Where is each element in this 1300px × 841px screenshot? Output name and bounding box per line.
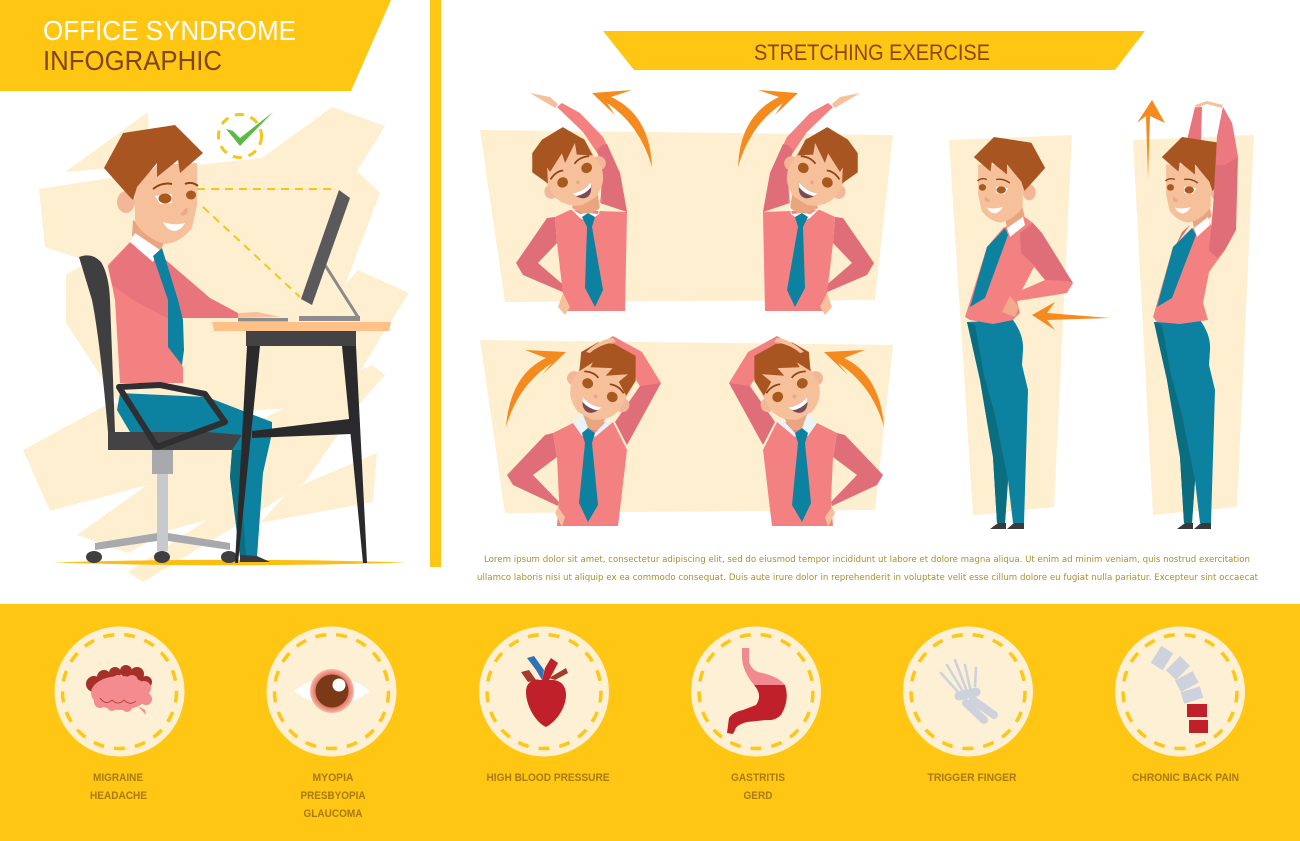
figure: side stretch left with arrow bbox=[516, 90, 652, 315]
label: gastritis gerd bbox=[731, 772, 785, 802]
figure: neck stretch right with arrow bbox=[729, 332, 884, 527]
figure: overhead stretch standing man bbox=[1137, 100, 1238, 529]
keyboard bbox=[238, 318, 288, 322]
label: migraine headache: MIGRAINE bbox=[93, 772, 143, 784]
symptom: gastritis gerd bbox=[691, 626, 821, 802]
floor shadow bbox=[53, 560, 406, 565]
heading: office syndrome: OFFICE SYNDROME bbox=[43, 15, 296, 46]
icon: brain bbox=[86, 665, 152, 715]
symptom: migraine headache bbox=[54, 626, 184, 802]
panel: symptoms band bbox=[0, 604, 1300, 841]
desk bbox=[212, 322, 391, 563]
label: trigger finger: TRIGGER FINGER bbox=[928, 772, 1017, 784]
label: high blood pressure: HIGH BLOOD PRESSURE bbox=[486, 772, 610, 784]
arrow: upward bbox=[1137, 100, 1165, 178]
figure: side stretch right with arrow bbox=[738, 90, 874, 315]
panel: overhead-stretch background bbox=[1133, 135, 1254, 515]
icon: stomach bbox=[727, 648, 787, 734]
label: gastritis gerd: GERD bbox=[744, 790, 773, 802]
label: migraine headache bbox=[90, 772, 147, 802]
heading: stretching exercise: STRETCHING EXERCISE bbox=[754, 40, 990, 65]
sight lines bbox=[197, 189, 337, 297]
icon: green check mark bbox=[218, 112, 273, 158]
symptom: high blood pressure bbox=[479, 626, 610, 784]
panel: back-press background bbox=[949, 135, 1072, 515]
figure: neck stretch left with arrow bbox=[506, 332, 661, 527]
label: myopia presbyopia glaucoma bbox=[300, 772, 366, 820]
divider bar bbox=[430, 0, 441, 567]
text block: lorem ipsum: ullamco laboris nisi ut aliquip ex ea commodo consequat. Duis aute irure dolor in reprehenderit in voluptate velit esse cillum dolore eu fugiat nulla pariatur. Excepteur sint occaecat bbox=[477, 573, 1258, 583]
seated man bbox=[104, 125, 280, 562]
symptom: myopia bbox=[266, 626, 396, 820]
heading: infographic: INFOGRAPHIC bbox=[43, 45, 222, 76]
panel: seated posture illustration bbox=[23, 107, 409, 582]
chair armrest bbox=[119, 385, 225, 447]
panel: title banner bbox=[0, 0, 391, 91]
cream background shapes bbox=[23, 107, 409, 582]
icon: heart bbox=[521, 656, 568, 727]
symptom: trigger finger bbox=[903, 626, 1033, 784]
icon: hand bones bbox=[941, 660, 994, 720]
panel: top side-stretch background bbox=[480, 130, 893, 302]
panel: bottom neck-stretch background bbox=[480, 340, 893, 513]
symptom: chronic back pain bbox=[1115, 626, 1245, 784]
label: migraine headache: HEADACHE bbox=[90, 790, 147, 802]
icon: eye bbox=[294, 669, 370, 713]
panel: stretching banner bbox=[603, 31, 1145, 70]
text block: lorem ipsum: Lorem ipsum dolor sit amet, consectetur adipiscing elit, sed do eiusmod tempor incididunt ut labore et dolore magna aliqua. Ut enim ad minim veniam, quis nostrud exercitation bbox=[484, 555, 1250, 565]
arrow: push forward bbox=[1032, 302, 1110, 330]
figure: back press standing man bbox=[965, 137, 1110, 529]
label: chronic back pain: CHRONIC BACK PAIN bbox=[1132, 772, 1239, 784]
label: myopia presbyopia glaucoma: MYOPIA bbox=[312, 772, 354, 784]
computer monitor bbox=[299, 190, 360, 321]
office chair bbox=[79, 255, 242, 563]
icon: spine bbox=[1151, 646, 1208, 733]
text block: lorem ipsum bbox=[477, 555, 1258, 583]
label: myopia presbyopia glaucoma: GLAUCOMA bbox=[304, 808, 363, 820]
label: gastritis gerd: GASTRITIS bbox=[731, 772, 785, 784]
label: myopia presbyopia glaucoma: PRESBYOPIA bbox=[300, 790, 366, 802]
